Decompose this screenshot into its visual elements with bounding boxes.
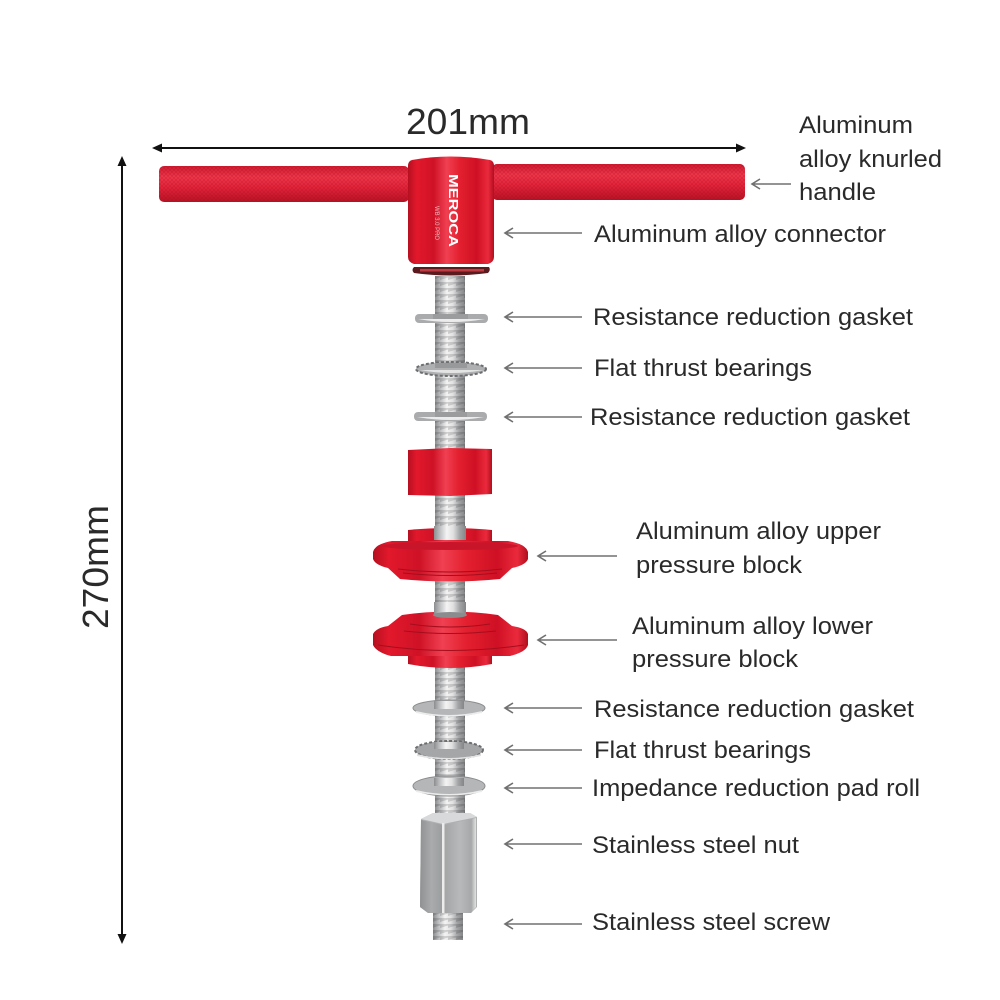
height label: 270mm: [75, 505, 116, 629]
width dimension line: [152, 101, 746, 152]
width label: 201mm: [406, 101, 530, 142]
connector model text: WB 3.0 PRO: [433, 206, 439, 240]
upper pressure block: [373, 526, 528, 582]
flat thrust bearing 2: [415, 741, 483, 760]
part labels: pressure block: [636, 552, 803, 579]
part labels: [590, 112, 942, 936]
part labels: pressure block: [632, 646, 799, 673]
part labels: Aluminum: [799, 112, 913, 139]
resistance reduction gasket 1: [415, 314, 488, 323]
stainless steel nut: [420, 813, 477, 913]
part labels: Stainless steel nut: [592, 832, 799, 859]
part labels: Flat thrust bearings: [594, 737, 811, 764]
part labels: Resistance reduction gasket: [594, 696, 914, 723]
part labels: Aluminum alloy upper: [636, 518, 881, 545]
lower pressure block: [373, 602, 528, 668]
resistance reduction gasket 2: [414, 412, 487, 421]
height dimension line: [75, 156, 126, 944]
knurled handle: left: [159, 166, 409, 202]
part labels: handle: [799, 179, 876, 206]
O-ring: [412, 267, 490, 276]
part labels: Flat thrust bearings: [594, 355, 812, 382]
part labels: Resistance reduction gasket: [590, 404, 910, 431]
knurled handle: right: [492, 164, 745, 200]
resistance reduction gasket 3: [413, 700, 485, 716]
part labels: Aluminum alloy connector: [594, 221, 886, 248]
part labels: Aluminum alloy lower: [632, 613, 873, 640]
connector brand text: MEROCA: [446, 174, 461, 248]
threaded screw shaft: [433, 276, 465, 940]
part labels: Stainless steel screw: [592, 909, 831, 936]
arrows: [505, 179, 791, 929]
flat thrust bearing 1: [416, 362, 486, 376]
red spacer: [408, 448, 492, 496]
part labels: Impedance reduction pad roll: [592, 775, 920, 802]
part labels: alloy knurled: [799, 146, 942, 173]
connector: [408, 156, 494, 276]
part labels: Resistance reduction gasket: [593, 304, 913, 331]
impedance reduction pad roll: [413, 776, 485, 796]
